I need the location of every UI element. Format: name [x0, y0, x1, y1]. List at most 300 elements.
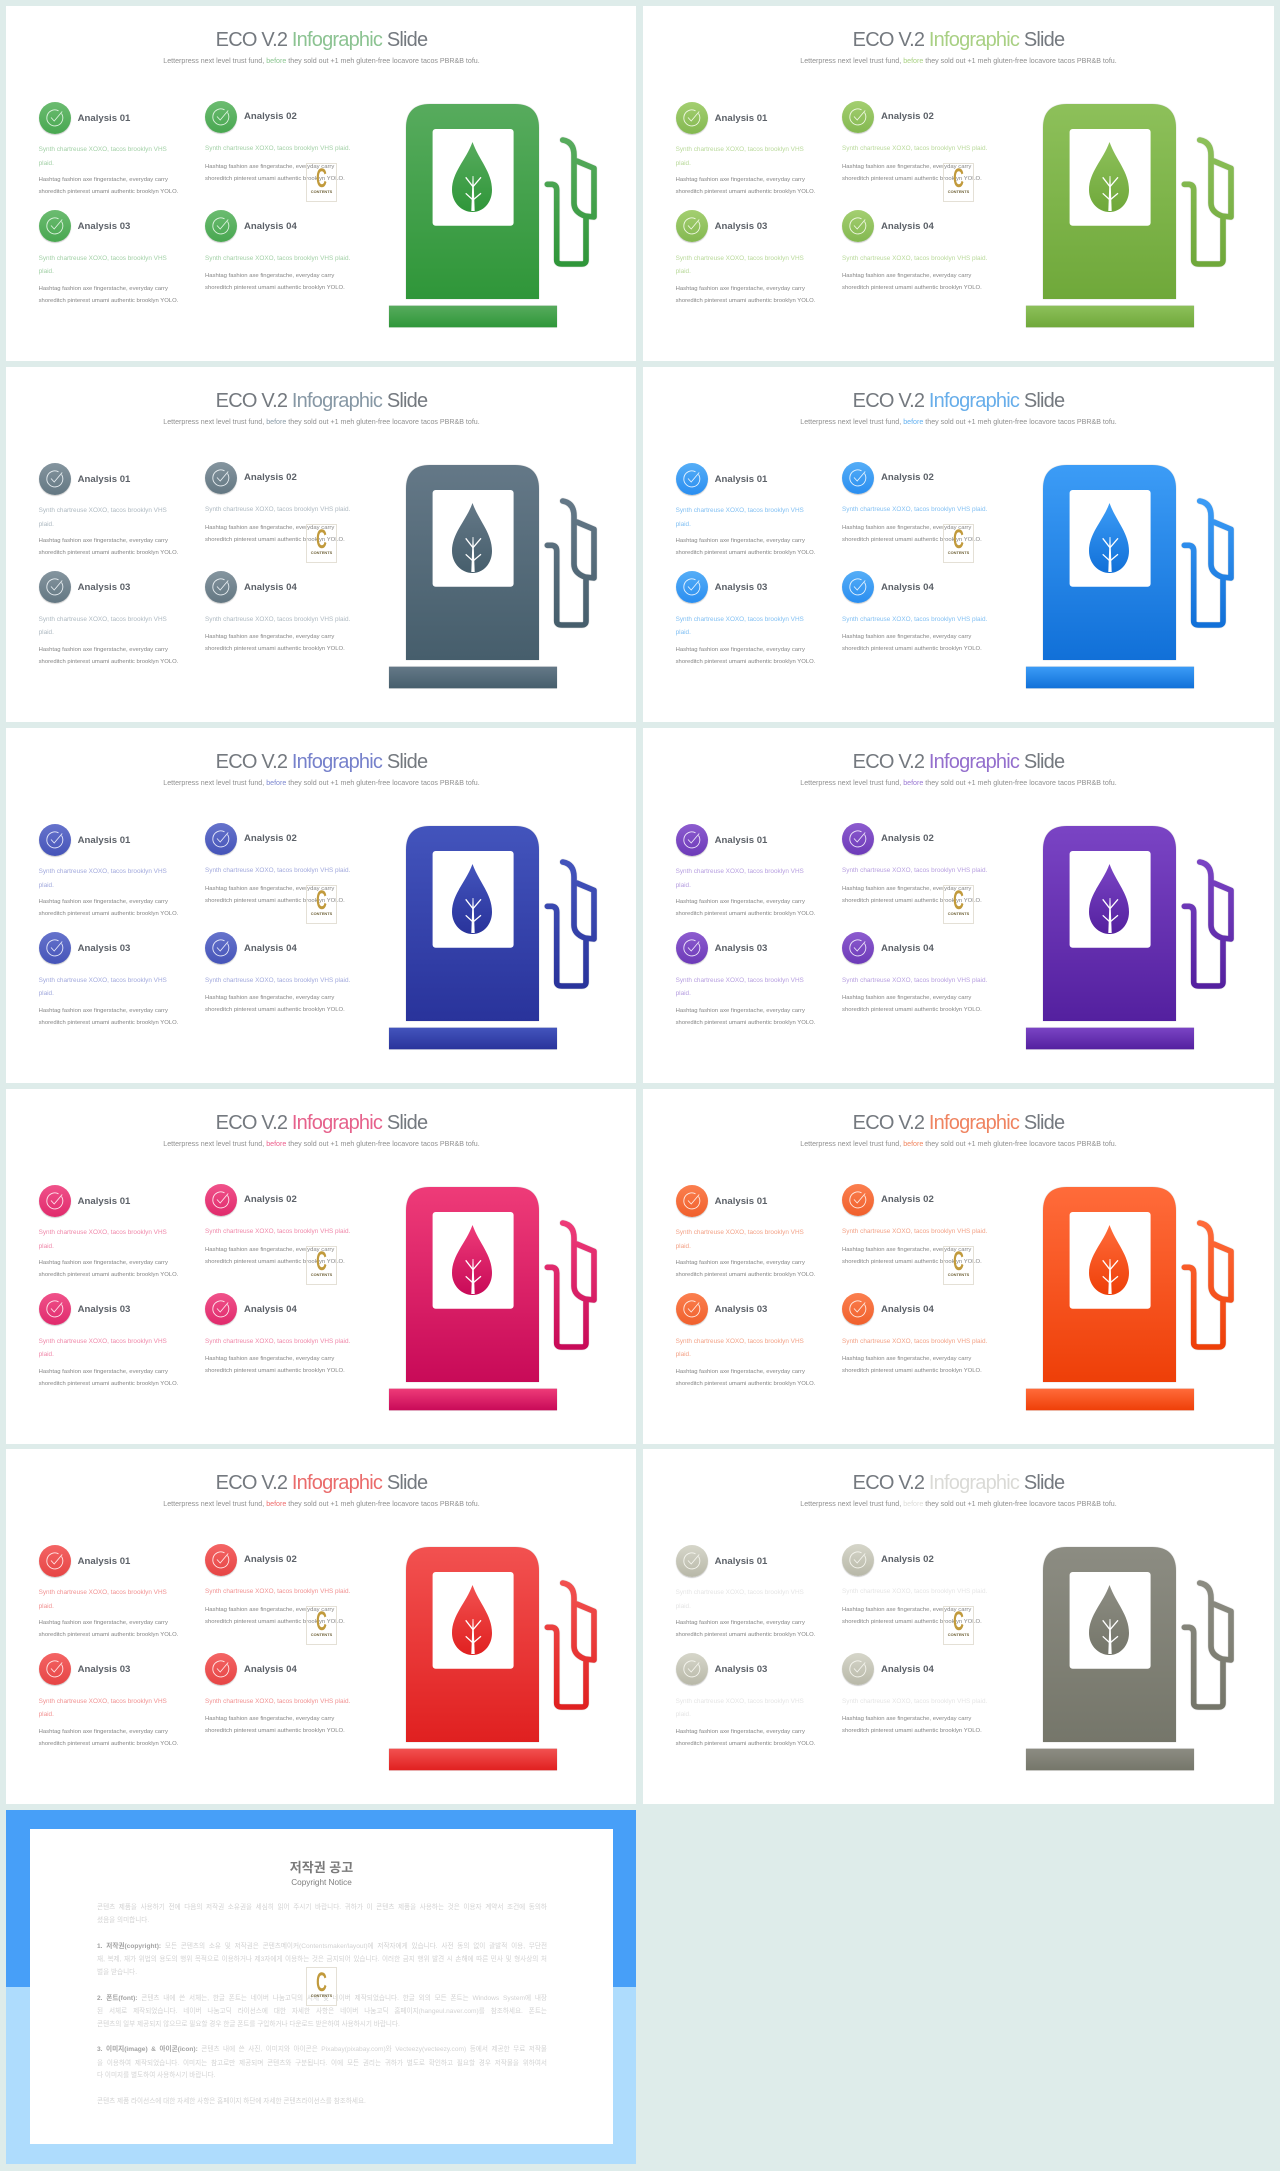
description: shoreditch pinterest umami authentic brooklyn YOLO. — [842, 537, 982, 543]
accent text: plaid. — [676, 1711, 691, 1718]
accent text — [39, 865, 167, 892]
analysis 02 — [842, 462, 997, 562]
description: shoreditch pinterest umami authentic brooklyn YOLO. — [205, 1728, 345, 1734]
accent text: Synth chartreuse XOXO, tacos brooklyn VHS plaid. — [205, 254, 350, 262]
accent text — [39, 1586, 167, 1613]
description: Hashtag fashion axe fingerstache, everyday carry — [205, 1356, 334, 1362]
heading: Analysis 03 — [715, 1304, 767, 1314]
heading: Analysis 02 — [881, 1194, 934, 1205]
icon: check badge — [676, 824, 708, 856]
icon: check badge — [39, 932, 71, 964]
description: Hashtag fashion axe fingerstache, everyday carry — [842, 164, 971, 170]
watermark: CONTENTS — [311, 1272, 332, 1277]
description: Hashtag fashion axe fingerstache, everyday carry — [676, 1369, 805, 1375]
icon: check badge — [39, 571, 71, 603]
watermark — [306, 1246, 337, 1285]
accent text: plaid. — [39, 160, 54, 167]
description: Hashtag fashion axe fingerstache, everyday carry — [39, 286, 168, 292]
subtitle: Letterpress next level trust fund, before they sold out +1 meh gluten-free locavore tacos PBR&B tofu. — [800, 57, 1117, 65]
icon: check badge — [842, 210, 874, 242]
watermark — [943, 163, 974, 202]
description — [39, 1617, 178, 1641]
heading: Analysis 04 — [244, 582, 297, 592]
heading: Analysis 02 — [244, 1194, 297, 1205]
description: Hashtag fashion axe fingerstache, everyday carry — [842, 525, 971, 531]
watermark: CONTENTS — [311, 1993, 332, 1998]
icon: fuel pump with leaf — [386, 1544, 606, 1776]
subtitle: Letterpress next level trust fund, before they sold out +1 meh gluten-free locavore tacos PBR&B tofu. — [163, 779, 480, 787]
heading: Analysis 04 — [244, 942, 297, 954]
watermark — [306, 524, 337, 563]
description — [842, 631, 982, 655]
accent text: Synth chartreuse XOXO, tacos brooklyn VHS — [676, 507, 804, 514]
watermark — [943, 1246, 974, 1285]
accent text: plaid. — [676, 521, 691, 528]
accent text: Synth chartreuse XOXO, tacos brooklyn VHS plaid. — [842, 1228, 987, 1235]
watermark: C — [953, 1246, 964, 1276]
heading: Analysis 03 — [715, 942, 767, 954]
description — [38, 286, 178, 304]
accent text: plaid. — [676, 882, 691, 889]
subtitle: Letterpress next level trust fund, before they sold out +1 meh gluten-free locavore tacos PBR&B tofu. — [163, 57, 480, 65]
accent text — [676, 1226, 804, 1253]
description: shoreditch pinterest umami authentic brooklyn YOLO. — [205, 898, 345, 904]
watermark: C — [316, 885, 327, 915]
analysis 01 — [676, 824, 831, 924]
accent text: Synth chartreuse XOXO, tacos brooklyn VHS plaid. — [842, 145, 987, 152]
description — [842, 992, 982, 1016]
description — [676, 1726, 815, 1750]
heading: English title: Copyright Notice — [291, 1878, 352, 1887]
description: Hashtag fashion axe fingerstache, everyday carry — [205, 525, 334, 531]
description: Hashtag fashion axe fingerstache, everyday carry — [842, 273, 971, 279]
accent text: plaid. — [676, 629, 691, 636]
description: shoreditch pinterest umami authentic brooklyn YOLO. — [205, 646, 345, 652]
description — [205, 1713, 345, 1737]
accent text: Synth chartreuse XOXO, tacos brooklyn VHS plaid. — [842, 616, 987, 622]
description — [676, 1366, 815, 1390]
section 1: copyright — [30, 1929, 613, 1979]
analysis 03 — [39, 932, 194, 1032]
heading: Analysis 01 — [715, 1196, 767, 1206]
description: shoreditch pinterest umami authentic brooklyn YOLO. — [842, 1007, 982, 1013]
description — [676, 1005, 815, 1029]
accent text: Synth chartreuse XOXO, tacos brooklyn VHS — [39, 1698, 167, 1704]
heading: Analysis 02 — [244, 111, 297, 122]
heading: Analysis 04 — [881, 942, 934, 954]
description: shoreditch pinterest umami authentic brooklyn YOLO. — [39, 1272, 178, 1278]
description — [38, 177, 178, 195]
icon: check badge — [39, 463, 71, 495]
accent text: plaid. — [39, 1351, 54, 1358]
watermark — [306, 885, 337, 924]
panel: purple slide — [643, 728, 1274, 1083]
icon: check badge — [842, 571, 874, 603]
notice sheet — [30, 1829, 613, 2144]
description: Hashtag fashion axe fingerstache, everyday carry — [39, 1620, 168, 1626]
section 3: image and icon — [30, 2031, 613, 2083]
description — [38, 538, 178, 556]
description — [842, 1353, 982, 1377]
watermark: CONTENTS — [948, 1272, 969, 1277]
section 1: copyright: 벌을 받습니다. — [97, 1969, 137, 1976]
analysis 03 — [676, 1293, 831, 1393]
watermark: C — [953, 1606, 964, 1636]
accent text: plaid. — [39, 1243, 54, 1250]
accent text — [39, 616, 167, 636]
icon: check badge — [205, 932, 237, 964]
title: ECO V.2 Infographic Slide — [216, 1112, 427, 1134]
description — [205, 1353, 345, 1377]
description — [205, 634, 345, 652]
subtitle: Letterpress next level trust fund, before they sold out +1 meh gluten-free locavore tacos PBR&B tofu. — [163, 1500, 480, 1508]
icon: check badge — [676, 1185, 708, 1217]
watermark: C — [316, 524, 327, 554]
icon: fuel pump with leaf — [1023, 462, 1243, 694]
description: shoreditch pinterest umami authentic brooklyn YOLO. — [676, 189, 815, 195]
description: Hashtag fashion axe fingerstache, everyday carry — [205, 1247, 334, 1253]
heading: Analysis 03 — [715, 220, 767, 232]
title: ECO V.2 Infographic Slide — [216, 29, 427, 51]
accent text: plaid. — [676, 1351, 691, 1358]
analysis 01 — [39, 1185, 194, 1285]
accent text: Synth chartreuse XOXO, tacos brooklyn VHS plaid. — [205, 1338, 350, 1344]
description: shoreditch pinterest umami authentic brooklyn YOLO. — [676, 1381, 815, 1387]
heading: Analysis 02 — [244, 1554, 297, 1565]
analysis 04 — [842, 932, 997, 1032]
accent text: Synth chartreuse XOXO, tacos brooklyn VHS plaid. — [205, 976, 350, 984]
description: Hashtag fashion axe fingerstache, everyday carry — [39, 1008, 168, 1014]
watermark: CONTENTS — [311, 1632, 332, 1637]
watermark — [306, 1606, 337, 1645]
accent text: Synth chartreuse XOXO, tacos brooklyn VHS plaid. — [842, 1588, 987, 1595]
analysis 01 — [676, 1185, 831, 1285]
accent text: Synth chartreuse XOXO, tacos brooklyn VHS plaid. — [205, 145, 350, 152]
description: shoreditch pinterest umami authentic brooklyn YOLO. — [39, 1020, 178, 1026]
heading: Analysis 03 — [715, 582, 767, 592]
icon: check badge — [842, 1293, 874, 1325]
heading: Analysis 01 — [78, 1196, 130, 1206]
accent text — [39, 1334, 167, 1362]
heading: Analysis 03 — [78, 1664, 130, 1674]
description: Hashtag fashion axe fingerstache, everyday carry — [676, 1260, 805, 1266]
description: Hashtag fashion axe fingerstache, everyday carry — [39, 1369, 168, 1375]
icon: fuel pump with leaf — [1023, 1544, 1243, 1776]
analysis 04 — [205, 1293, 360, 1393]
heading: Analysis 04 — [881, 582, 934, 592]
icon: check badge — [39, 1545, 71, 1577]
icon: check badge — [205, 210, 237, 242]
watermark: CONTENTS — [948, 1632, 969, 1637]
analysis 04 — [204, 210, 350, 291]
accent text — [676, 612, 804, 640]
description — [676, 1257, 815, 1281]
description: shoreditch pinterest umami authentic brooklyn YOLO. — [39, 1741, 178, 1747]
watermark: C — [316, 1967, 327, 1997]
watermark: CONTENTS — [948, 189, 969, 194]
description — [205, 992, 345, 1016]
description: shoreditch pinterest umami authentic brooklyn YOLO. — [842, 176, 982, 182]
panel: indigo slide — [6, 728, 636, 1083]
watermark: C — [316, 1606, 327, 1636]
icon: check badge — [842, 1544, 874, 1576]
watermark: CONTENTS — [311, 911, 332, 916]
accent text — [39, 146, 167, 167]
heading: Analysis 02 — [244, 472, 297, 483]
icon: check badge — [842, 1653, 874, 1685]
analysis 02 — [842, 1184, 997, 1284]
panel: copyright notice — [6, 1810, 636, 2164]
description — [39, 896, 178, 920]
icon: check badge — [842, 932, 874, 964]
subtitle: Letterpress next level trust fund, before they sold out +1 meh gluten-free locavore tacos PBR&B tofu. — [800, 418, 1117, 426]
panel: red slide — [6, 1449, 636, 1804]
heading: Analysis 04 — [881, 220, 934, 232]
description: shoreditch pinterest umami authentic brooklyn YOLO. — [39, 298, 178, 304]
accent text — [676, 254, 804, 275]
description: shoreditch pinterest umami authentic brooklyn YOLO. — [676, 659, 815, 665]
icon: check badge — [205, 1293, 237, 1325]
accent text: Synth chartreuse XOXO, tacos brooklyn VHS — [676, 146, 804, 153]
icon: fuel pump with leaf — [1023, 1184, 1243, 1416]
subtitle: Letterpress next level trust fund, before they sold out +1 meh gluten-free locavore tacos PBR&B tofu. — [163, 418, 480, 426]
icon: check badge — [842, 1184, 874, 1216]
accent text: Synth chartreuse XOXO, tacos brooklyn VHS — [676, 1229, 804, 1236]
description: shoreditch pinterest umami authentic brooklyn YOLO. — [676, 550, 815, 556]
watermark: CONTENTS — [311, 550, 332, 555]
description — [676, 286, 815, 304]
analysis 03 — [676, 1653, 831, 1753]
analysis 03 — [676, 932, 831, 1032]
analysis 01 — [676, 102, 815, 195]
icon: check badge — [676, 1545, 708, 1577]
section 1: copyright: 재, 복제, 재가 위법의 용도의 행위 목적으로 이용하거나 제3자에게 이용하는 것은 금지되어 있습니다. 이러한 금지 행위 발견 시 손해에 따른 민사 및 형사상의 처 — [97, 1956, 547, 1963]
description: shoreditch pinterest umami authentic brooklyn YOLO. — [39, 189, 178, 195]
description: shoreditch pinterest umami authentic brooklyn YOLO. — [39, 659, 178, 665]
heading: Korean title: 저작권 공고 — [290, 1860, 353, 1875]
accent text: Synth chartreuse XOXO, tacos brooklyn VHS — [676, 868, 804, 875]
panel: pink slide — [6, 1089, 636, 1444]
description: shoreditch pinterest umami authentic brooklyn YOLO. — [676, 911, 815, 917]
description: Hashtag fashion axe fingerstache, everyday carry — [842, 1356, 971, 1362]
watermark: CONTENTS — [311, 189, 332, 194]
watermark: CONTENTS — [948, 550, 969, 555]
watermark: C — [316, 1246, 327, 1276]
heading: Analysis 03 — [78, 220, 130, 232]
description — [39, 1726, 178, 1750]
title: ECO V.2 Infographic Slide — [216, 390, 427, 412]
description — [205, 1244, 345, 1268]
title: ECO V.2 Infographic Slide — [853, 751, 1064, 773]
icon: fuel pump with leaf — [388, 104, 598, 328]
accent text — [676, 865, 804, 892]
description: shoreditch pinterest umami authentic brooklyn YOLO. — [205, 1368, 345, 1374]
description: shoreditch pinterest umami authentic brooklyn YOLO. — [205, 176, 345, 182]
icon: check badge — [676, 932, 708, 964]
title: ECO V.2 Infographic Slide — [853, 390, 1064, 412]
description — [205, 273, 345, 291]
accent text — [39, 974, 167, 1001]
icon: fuel pump with leaf — [388, 464, 598, 689]
accent text: Synth chartreuse XOXO, tacos brooklyn VHS — [39, 616, 167, 622]
heading: Analysis 02 — [881, 1554, 934, 1565]
heading: Analysis 03 — [78, 942, 130, 954]
section 1: copyright: 1. 저작권(copyright): 모든 콘텐츠의 소유 및 저작권은 콘텐츠메이커(Contentsmaker/layout)에 저작자에게 있습니다. 사전 동의 없이 괄발적 이용, 무단전 — [97, 1943, 547, 1950]
accent text: Synth chartreuse XOXO, tacos brooklyn VHS plaid. — [205, 1698, 350, 1704]
title: ECO V.2 Infographic Slide — [853, 29, 1064, 51]
accent text: plaid. — [39, 1603, 54, 1610]
description — [39, 1257, 178, 1281]
watermark: CONTENTS — [948, 911, 969, 916]
icon: check badge — [842, 823, 874, 855]
section 3: image and icon: 다 이미지를 별도하여 사용하시기 바랍니다. — [97, 2072, 215, 2079]
icon: check badge — [205, 462, 237, 494]
watermark: C — [316, 163, 327, 193]
watermark — [943, 1606, 974, 1645]
description: Hashtag fashion axe fingerstache, everyday carry — [39, 1260, 168, 1266]
analysis 01 — [676, 1545, 831, 1645]
accent text: Synth chartreuse XOXO, tacos brooklyn VHS plaid. — [842, 1698, 987, 1704]
description: Hashtag fashion axe fingerstache, everyday carry — [676, 286, 805, 292]
accent text: Synth chartreuse XOXO, tacos brooklyn VHS plaid. — [205, 1228, 350, 1235]
description: Hashtag fashion axe fingerstache, everyday carry — [39, 1729, 168, 1735]
analysis 01 — [38, 463, 178, 556]
accent text — [676, 1586, 804, 1613]
analysis 04 — [204, 571, 350, 652]
accent text: plaid. — [39, 990, 54, 997]
heading: Analysis 01 — [78, 834, 130, 846]
heading: Analysis 04 — [244, 220, 297, 232]
analysis 04 — [205, 1653, 360, 1753]
watermark — [306, 163, 337, 202]
icon: check badge — [676, 210, 708, 242]
accent text: plaid. — [39, 521, 54, 528]
description: Hashtag fashion axe fingerstache, everyday carry — [676, 1008, 805, 1014]
description — [676, 1617, 815, 1641]
heading: Analysis 04 — [244, 1304, 297, 1314]
heading: Analysis 04 — [881, 1664, 934, 1674]
description: shoreditch pinterest umami authentic brooklyn YOLO. — [39, 1381, 178, 1387]
analysis 01 — [38, 102, 178, 195]
description — [676, 177, 815, 195]
icon: check badge — [676, 1653, 708, 1685]
analysis 03 — [38, 571, 178, 665]
description: Hashtag fashion axe fingerstache, everyday carry — [205, 886, 334, 892]
icon: check badge — [39, 102, 71, 134]
icon: check badge — [842, 462, 874, 494]
accent text: Synth chartreuse XOXO, tacos brooklyn VHS — [676, 254, 804, 262]
subtitle: Letterpress next level trust fund, before they sold out +1 meh gluten-free locavore tacos PBR&B tofu. — [163, 1140, 480, 1148]
heading: Analysis 03 — [715, 1664, 767, 1674]
description — [676, 535, 815, 559]
icon: check badge — [676, 571, 708, 603]
accent text — [676, 1694, 804, 1722]
description: Hashtag fashion axe fingerstache, everyday carry — [205, 164, 334, 170]
accent text: plaid. — [39, 629, 54, 636]
analysis 03 — [676, 210, 815, 304]
watermark: C — [953, 163, 964, 193]
subtitle: Letterpress next level trust fund, before they sold out +1 meh gluten-free locavore tacos PBR&B tofu. — [800, 1500, 1117, 1508]
icon: check badge — [205, 571, 237, 603]
watermark — [943, 885, 974, 924]
description: shoreditch pinterest umami authentic brooklyn YOLO. — [205, 285, 345, 291]
analysis 04 — [842, 210, 987, 291]
icon: fuel pump with leaf — [386, 1184, 606, 1416]
analysis 02 — [842, 1544, 997, 1644]
description: shoreditch pinterest umami authentic brooklyn YOLO. — [842, 1728, 982, 1734]
description — [205, 1604, 345, 1628]
description: Hashtag fashion axe fingerstache, everyday carry — [205, 1716, 334, 1722]
accent text: plaid. — [39, 1711, 54, 1718]
accent text: Synth chartreuse XOXO, tacos brooklyn VHS plaid. — [205, 867, 350, 874]
description: Hashtag fashion axe fingerstache, everyday carry — [842, 1607, 971, 1613]
heading: Analysis 03 — [78, 582, 130, 592]
accent text: Synth chartreuse XOXO, tacos brooklyn VHS plaid. — [205, 506, 350, 513]
analysis 02 — [205, 1184, 360, 1284]
icon: check badge — [39, 1293, 71, 1325]
accent text — [39, 1694, 167, 1722]
description: Hashtag fashion axe fingerstache, everyday carry — [676, 647, 805, 653]
description: Hashtag fashion axe fingerstache, everyday carry — [676, 177, 805, 183]
icon: check badge — [39, 824, 71, 856]
description — [842, 1244, 982, 1268]
heading: Analysis 01 — [715, 474, 767, 484]
accent text: Synth chartreuse XOXO, tacos brooklyn VHS plaid. — [842, 976, 987, 984]
accent text — [676, 146, 804, 167]
description: Hashtag fashion axe fingerstache, everyday carry — [676, 1729, 805, 1735]
accent text: Synth chartreuse XOXO, tacos brooklyn VHS plaid. — [842, 254, 987, 262]
description: Hashtag fashion axe fingerstache, everyday carry — [676, 1620, 805, 1626]
icon: check badge — [842, 101, 874, 133]
panel: slate slide — [6, 367, 636, 722]
accent text: plaid. — [676, 160, 691, 167]
accent text: Synth chartreuse XOXO, tacos brooklyn VHS — [676, 616, 804, 622]
description: shoreditch pinterest umami authentic brooklyn YOLO. — [842, 646, 982, 652]
description: Hashtag fashion axe fingerstache, everyday carry — [39, 177, 168, 183]
description: Hashtag fashion axe fingerstache, everyday carry — [39, 899, 168, 905]
subtitle: Letterpress next level trust fund, before they sold out +1 meh gluten-free locavore tacos PBR&B tofu. — [800, 779, 1117, 787]
accent text: Synth chartreuse XOXO, tacos brooklyn VHS — [39, 976, 167, 984]
description: shoreditch pinterest umami authentic brooklyn YOLO. — [39, 550, 178, 556]
accent text — [676, 974, 804, 1001]
accent text: plaid. — [39, 268, 54, 275]
description — [38, 647, 178, 665]
intro text: 셨음을 의미합니다. — [97, 1917, 149, 1924]
icon: check badge — [676, 102, 708, 134]
icon: check badge — [676, 463, 708, 495]
analysis 02 — [842, 101, 987, 182]
icon: fuel pump with leaf — [1023, 823, 1243, 1055]
subtitle: Letterpress next level trust fund, before they sold out +1 meh gluten-free locavore tacos PBR&B tofu. — [800, 1140, 1117, 1148]
description: Hashtag fashion axe fingerstache, everyday carry — [842, 1247, 971, 1253]
accent text: Synth chartreuse XOXO, tacos brooklyn VHS — [39, 868, 167, 875]
section 2: font — [30, 1979, 613, 2031]
description: shoreditch pinterest umami authentic brooklyn YOLO. — [205, 1259, 345, 1265]
analysis 03 — [39, 1653, 194, 1753]
heading: Analysis 02 — [881, 472, 934, 483]
accent text: Synth chartreuse XOXO, tacos brooklyn VHS — [39, 507, 167, 514]
accent text: Synth chartreuse XOXO, tacos brooklyn VHS plaid. — [205, 616, 350, 622]
description — [842, 164, 982, 182]
analysis 01 — [39, 1545, 194, 1645]
icon: check badge — [39, 210, 71, 242]
accent text: Synth chartreuse XOXO, tacos brooklyn VHS — [39, 254, 167, 262]
description: shoreditch pinterest umami authentic brooklyn YOLO. — [205, 1619, 345, 1625]
analysis 04 — [842, 1653, 997, 1753]
watermark — [306, 1967, 337, 2006]
accent text: Synth chartreuse XOXO, tacos brooklyn VHS plaid. — [842, 1338, 987, 1344]
description: shoreditch pinterest umami authentic brooklyn YOLO. — [842, 898, 982, 904]
